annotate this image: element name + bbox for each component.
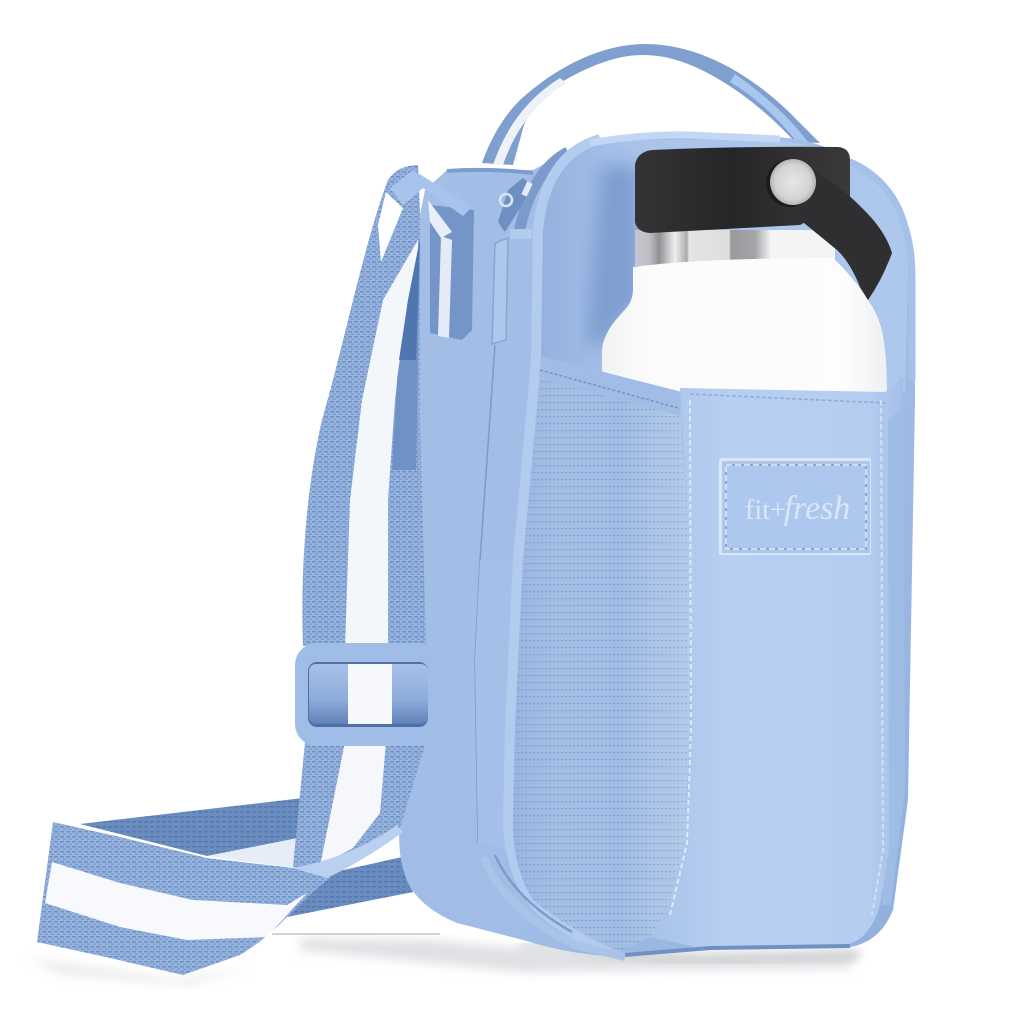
zipper track (518, 152, 568, 238)
cap handle (772, 165, 892, 300)
strap hardware and tab (390, 170, 474, 340)
front pocket (625, 377, 903, 955)
top front panel (536, 139, 908, 392)
top seam (447, 170, 533, 173)
shade behind bottle (585, 165, 640, 345)
carry handle (482, 44, 820, 165)
strap dark stripe (392, 238, 420, 470)
logo patch (719, 458, 871, 555)
ground shadow (30, 934, 860, 985)
strap: front band with white stripe (37, 742, 425, 975)
mesh side pocket (513, 356, 690, 952)
gusset seam (475, 345, 495, 843)
steel button (766, 159, 814, 207)
main piping (508, 139, 620, 955)
bottom shadow edge (625, 946, 850, 955)
zipper pull (492, 178, 533, 344)
strap: upper section (302, 165, 426, 646)
logo text: fit+fresh (745, 490, 850, 527)
strap: rear band, lower (80, 798, 413, 917)
outer piping (850, 162, 912, 380)
lower zipper band (483, 857, 625, 957)
cap (635, 147, 850, 233)
mesh pocket top band (539, 356, 682, 416)
bag body (399, 132, 915, 957)
right side strip (882, 378, 905, 905)
bottle (602, 147, 892, 395)
strap gap (378, 192, 403, 262)
strap white stripe (345, 240, 418, 646)
gusset inner band (475, 560, 518, 850)
top piping (590, 135, 780, 143)
steel neck (635, 230, 835, 266)
strap slider buckle (295, 643, 440, 746)
bottle body (602, 258, 887, 395)
